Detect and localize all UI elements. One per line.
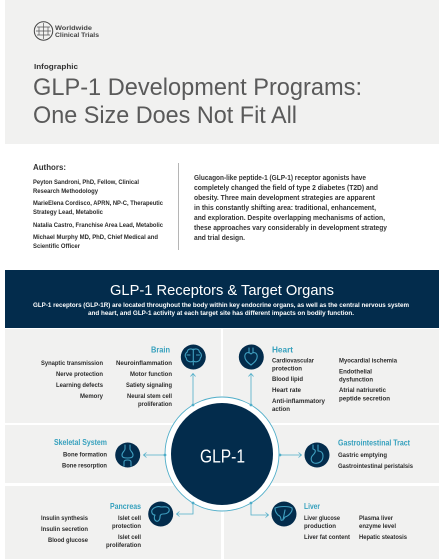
text: brain: Memory bbox=[80, 393, 104, 400]
authors: Authors: bbox=[33, 163, 66, 172]
authors: Natalia Castro, Franchise Area Lead, Metabolic bbox=[33, 222, 164, 229]
text: brain: Neural stem cell bbox=[127, 393, 172, 400]
text: heart: Blood lipid bbox=[272, 376, 303, 383]
icon: brain bbox=[181, 344, 206, 370]
text: skeletal system: Bone formation bbox=[63, 452, 107, 458]
central circle: GLP-1 bbox=[165, 397, 279, 511]
text: brain: Neuroinflammation bbox=[116, 360, 172, 367]
arrow: to brain bbox=[190, 374, 196, 406]
text: pancreas: proliferation bbox=[106, 542, 141, 549]
intro paragraph: completely changed the field of type 2 diabetes (T2D) and bbox=[194, 184, 378, 192]
icon: pancreas bbox=[148, 502, 173, 526]
authors: Michael Murphy MD, PhD, Chief Medical and bbox=[33, 234, 158, 241]
icon: skeletal joint bbox=[115, 442, 140, 468]
text: heart: Cardiovascular bbox=[272, 358, 315, 364]
text: liver: Plasma liver bbox=[359, 515, 394, 522]
logo: Worldwide bbox=[55, 25, 92, 32]
text: heart: dysfunction bbox=[339, 376, 373, 384]
text: heart: action bbox=[272, 406, 290, 413]
text: gastrointestinal tract bbox=[338, 438, 414, 470]
text: pancreas: Insulin synthesis bbox=[41, 515, 89, 522]
icon: liver bbox=[272, 502, 296, 526]
text: brain: Nerve protection bbox=[56, 371, 103, 378]
text: heart: Heart bbox=[272, 346, 293, 354]
intro paragraph: these approaches vary considerably in development strategy bbox=[194, 224, 387, 232]
section banner: GLP-1 Receptors & Target Organs bbox=[110, 282, 334, 299]
text: brain: Synaptic transmission bbox=[41, 360, 103, 367]
icon: heart bbox=[239, 344, 264, 370]
intro paragraph bbox=[194, 174, 387, 242]
authors: Scientific Officer bbox=[33, 243, 81, 250]
text: brain: Motor function bbox=[130, 371, 172, 378]
organ panel backgrounds bbox=[5, 329, 439, 559]
text: heart: Anti-inflammatory bbox=[272, 398, 326, 405]
text: heart: Atrial natriuretic bbox=[339, 387, 387, 394]
text: liver: Liver fat content bbox=[304, 534, 350, 541]
logo: Clinical Trials bbox=[55, 32, 99, 39]
authors: Strategy Lead, Metabolic bbox=[33, 209, 104, 216]
text: pancreas: Blood glucose bbox=[48, 537, 89, 544]
text: liver: production bbox=[304, 523, 336, 530]
text: heart: Heart rate bbox=[272, 387, 302, 394]
arrow: to pancreas bbox=[176, 502, 194, 516]
text: pancreas: Pancreas bbox=[110, 502, 141, 511]
text: heart: peptide secretion bbox=[339, 396, 390, 402]
central circle: GLP-1: GLP-1 bbox=[200, 446, 245, 466]
authors: Research Methodology bbox=[33, 188, 99, 195]
text: skeletal system: Bone resorption bbox=[62, 462, 107, 470]
text: heart: Myocardial ischemia bbox=[339, 358, 398, 364]
title: GLP-1 Development Programs: bbox=[33, 74, 362, 101]
section banner: GLP-1 receptors (GLP-1R) are located throughout the body within key endocrine organs, as well as the central nervous system bbox=[33, 302, 409, 309]
logo bbox=[34, 22, 99, 40]
header panel bbox=[5, 0, 439, 144]
intro paragraph: Glucagon-like peptide-1 (GLP-1) receptor agonists have bbox=[194, 174, 366, 182]
text: liver: Liver bbox=[304, 502, 320, 511]
arrow: to heart bbox=[248, 374, 254, 406]
label: infographic: Infographic bbox=[34, 62, 78, 71]
text: liver: Liver glucose bbox=[304, 515, 341, 522]
text: brain: Satiety signaling bbox=[126, 382, 172, 389]
section banner bbox=[5, 270, 439, 328]
text: brain: Brain bbox=[151, 346, 170, 354]
text: pancreas: Insulin secretion bbox=[41, 526, 88, 533]
authors: MarieElena Cordisco, APRN, NP-C, Therapeutic bbox=[33, 200, 164, 207]
text: skeletal system: Skeletal System bbox=[54, 438, 107, 447]
text: gastrointestinal tract: Gastric emptying bbox=[338, 452, 387, 459]
intro paragraph: and exploration. Despite overlapping mechanisms of action, bbox=[194, 214, 385, 222]
text: heart bbox=[272, 346, 398, 413]
authors bbox=[33, 163, 164, 250]
text: pancreas: protection bbox=[112, 523, 141, 530]
intro paragraph: in this constantly shifting area: traditional, enhancement, bbox=[194, 204, 376, 212]
text: liver: Hepatic steatosis bbox=[359, 534, 408, 541]
text: liver bbox=[304, 502, 408, 541]
title: One Size Does Not Fit All bbox=[33, 102, 297, 129]
text: pancreas bbox=[41, 502, 141, 549]
text: heart: protection bbox=[272, 366, 302, 372]
icon: stomach bbox=[304, 442, 330, 468]
intro paragraph: and trial design. bbox=[194, 234, 245, 242]
intro paragraph: obesity. Three main development strategies are apparent bbox=[194, 194, 376, 202]
section banner: and heart, and GLP-1 activity at each target site has different impacts on bodily function. bbox=[88, 310, 354, 317]
text: skeletal system bbox=[54, 438, 107, 470]
authors: Peyton Sandroni, PhD, Fellow, Clinical bbox=[33, 179, 139, 186]
text: pancreas: Islet cell bbox=[118, 515, 141, 522]
text: brain: Learning defects bbox=[56, 382, 104, 389]
text: liver: enzyme level bbox=[359, 523, 396, 530]
text: brain bbox=[41, 346, 172, 408]
text: gastrointestinal tract: Gastrointestinal peristalsis bbox=[338, 463, 414, 470]
arrow: to skeletal system bbox=[144, 452, 166, 458]
text: gastrointestinal tract: Gastrointestinal Tract bbox=[338, 438, 410, 448]
text: brain: proliferation bbox=[138, 401, 172, 408]
text: heart: Endothelial bbox=[339, 368, 372, 376]
title bbox=[33, 74, 362, 129]
arrow: to liver bbox=[250, 502, 268, 518]
arrow: to gastrointestinal tract bbox=[279, 452, 302, 458]
text: pancreas: Islet cell bbox=[118, 534, 141, 541]
